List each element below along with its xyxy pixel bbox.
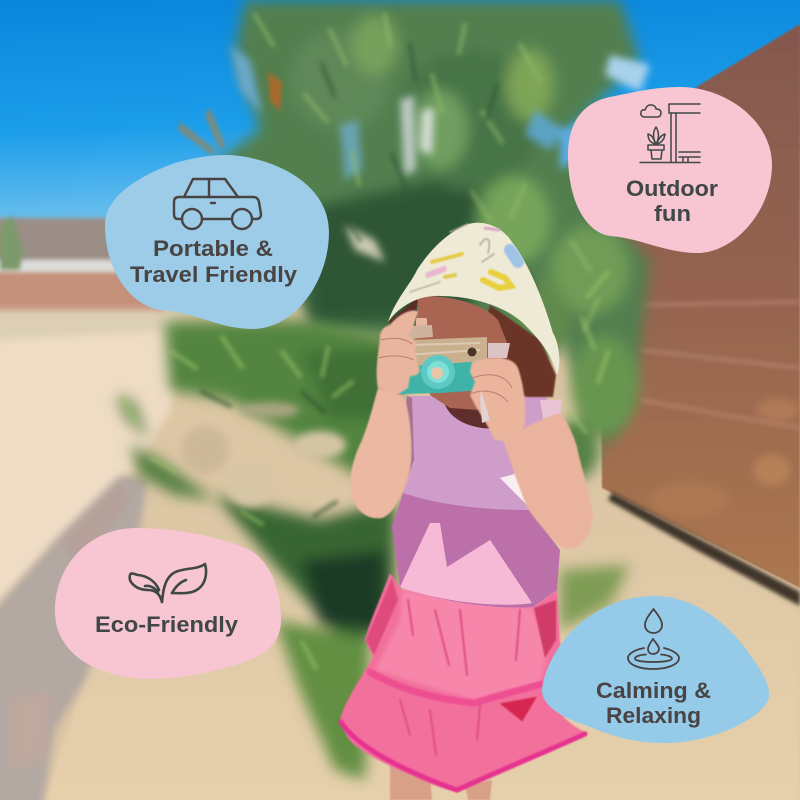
photo: child with toy camera (340, 223, 593, 800)
icon: patio with plant (640, 104, 700, 162)
sky (0, 0, 800, 240)
face in shade (415, 296, 508, 410)
badge: calming and relaxing (542, 596, 769, 743)
skirt (340, 573, 587, 792)
wooden wall (600, 24, 800, 606)
badge: eco-friendly (55, 528, 281, 679)
dress top panel (402, 396, 562, 510)
right hand (470, 358, 525, 442)
label (130, 236, 298, 287)
right arm (503, 413, 593, 549)
left arm (350, 388, 411, 518)
upper tree (205, 0, 650, 480)
icon: leaves (130, 564, 206, 602)
lower tree (115, 320, 630, 780)
sky gaps and branches (230, 45, 650, 262)
base ground (0, 240, 800, 800)
shrub gaps (181, 402, 346, 507)
label: Relaxing (606, 703, 701, 728)
toy camera (400, 318, 510, 394)
blob (542, 596, 769, 743)
blob (105, 155, 329, 329)
label: Portable & (153, 236, 273, 261)
icon: water drop (628, 609, 679, 669)
dress middle panel (392, 493, 560, 608)
distant building (0, 215, 165, 314)
legs (390, 765, 492, 800)
label: Travel Friendly (130, 262, 298, 287)
pale path (0, 310, 185, 610)
hair (480, 305, 556, 397)
label: fun (654, 201, 691, 226)
blob (568, 87, 772, 253)
label: Outdoor (626, 176, 718, 201)
brick walkway (0, 475, 148, 800)
shrub needles (122, 272, 608, 668)
badge: outdoor fun (568, 87, 772, 253)
needle texture (255, 15, 598, 330)
sun hat (388, 223, 559, 375)
label (626, 176, 718, 226)
label (596, 678, 711, 728)
left hand (377, 311, 420, 396)
blob (55, 528, 281, 679)
badge: portable and travel friendly (105, 155, 329, 329)
label: Eco-Friendly (95, 612, 239, 637)
icon: car (174, 179, 261, 229)
gravel ground (40, 480, 800, 800)
label: Calming & (596, 678, 711, 703)
